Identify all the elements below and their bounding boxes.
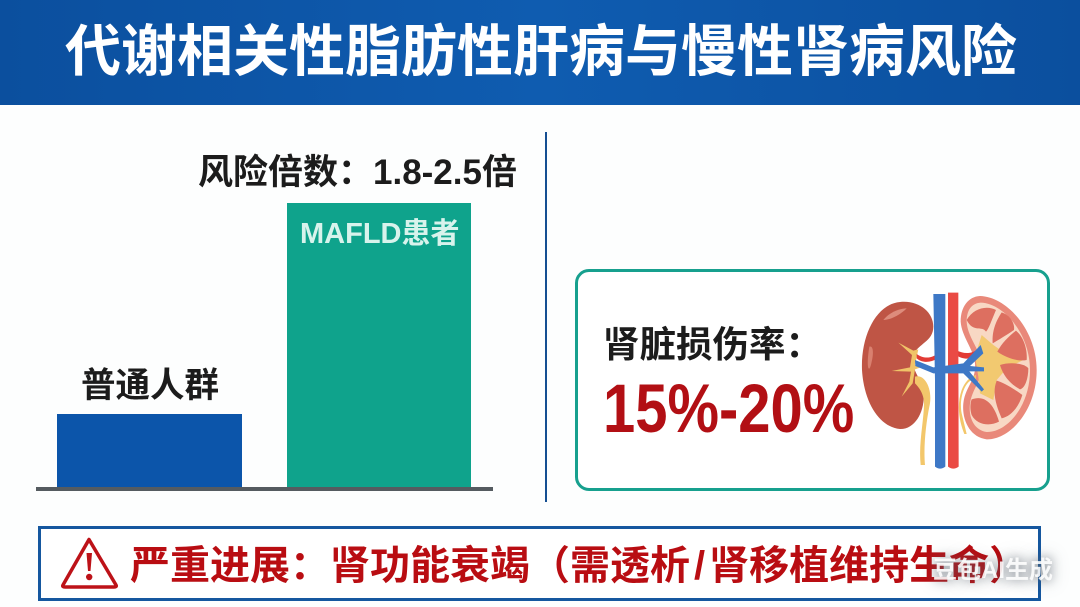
panel: severe progression callout bbox=[38, 526, 1041, 601]
vena cava bbox=[933, 294, 945, 469]
callout text: 严重进展：肾功能衰竭（需透析/肾移植维持生命） bbox=[130, 544, 1029, 588]
bar label: general population: 普通人群 bbox=[81, 367, 219, 405]
kidney damage value: 15%-20% bbox=[603, 370, 854, 447]
bar: MAFLD patients bbox=[287, 203, 471, 488]
aorta bbox=[947, 293, 959, 469]
watermark: 豆包AI生成 bbox=[933, 557, 1053, 584]
bar label: MAFLD patients: MAFLD患者 bbox=[300, 218, 459, 250]
right kidney bbox=[961, 296, 1037, 439]
risk multiple label: 风险倍数：1.8-2.5倍 bbox=[198, 153, 517, 192]
chart axis bbox=[36, 487, 493, 491]
ureters bbox=[915, 376, 930, 465]
panel: kidney damage rate bbox=[575, 269, 1050, 491]
title: 代谢相关性脂肪性肝病与慢性肾病风险 bbox=[65, 20, 1017, 83]
icon: warning triangle bbox=[60, 538, 118, 589]
bar: general population bbox=[57, 414, 242, 488]
kidney damage label: 肾脏损伤率： bbox=[603, 324, 822, 365]
renal veins bbox=[915, 345, 984, 392]
panel: bar chart bbox=[36, 153, 517, 491]
renal arteries bbox=[917, 353, 937, 362]
left kidney bbox=[862, 302, 933, 429]
center divider bbox=[545, 132, 547, 502]
header banner bbox=[0, 0, 1080, 105]
icon: kidneys bbox=[862, 292, 1037, 469]
